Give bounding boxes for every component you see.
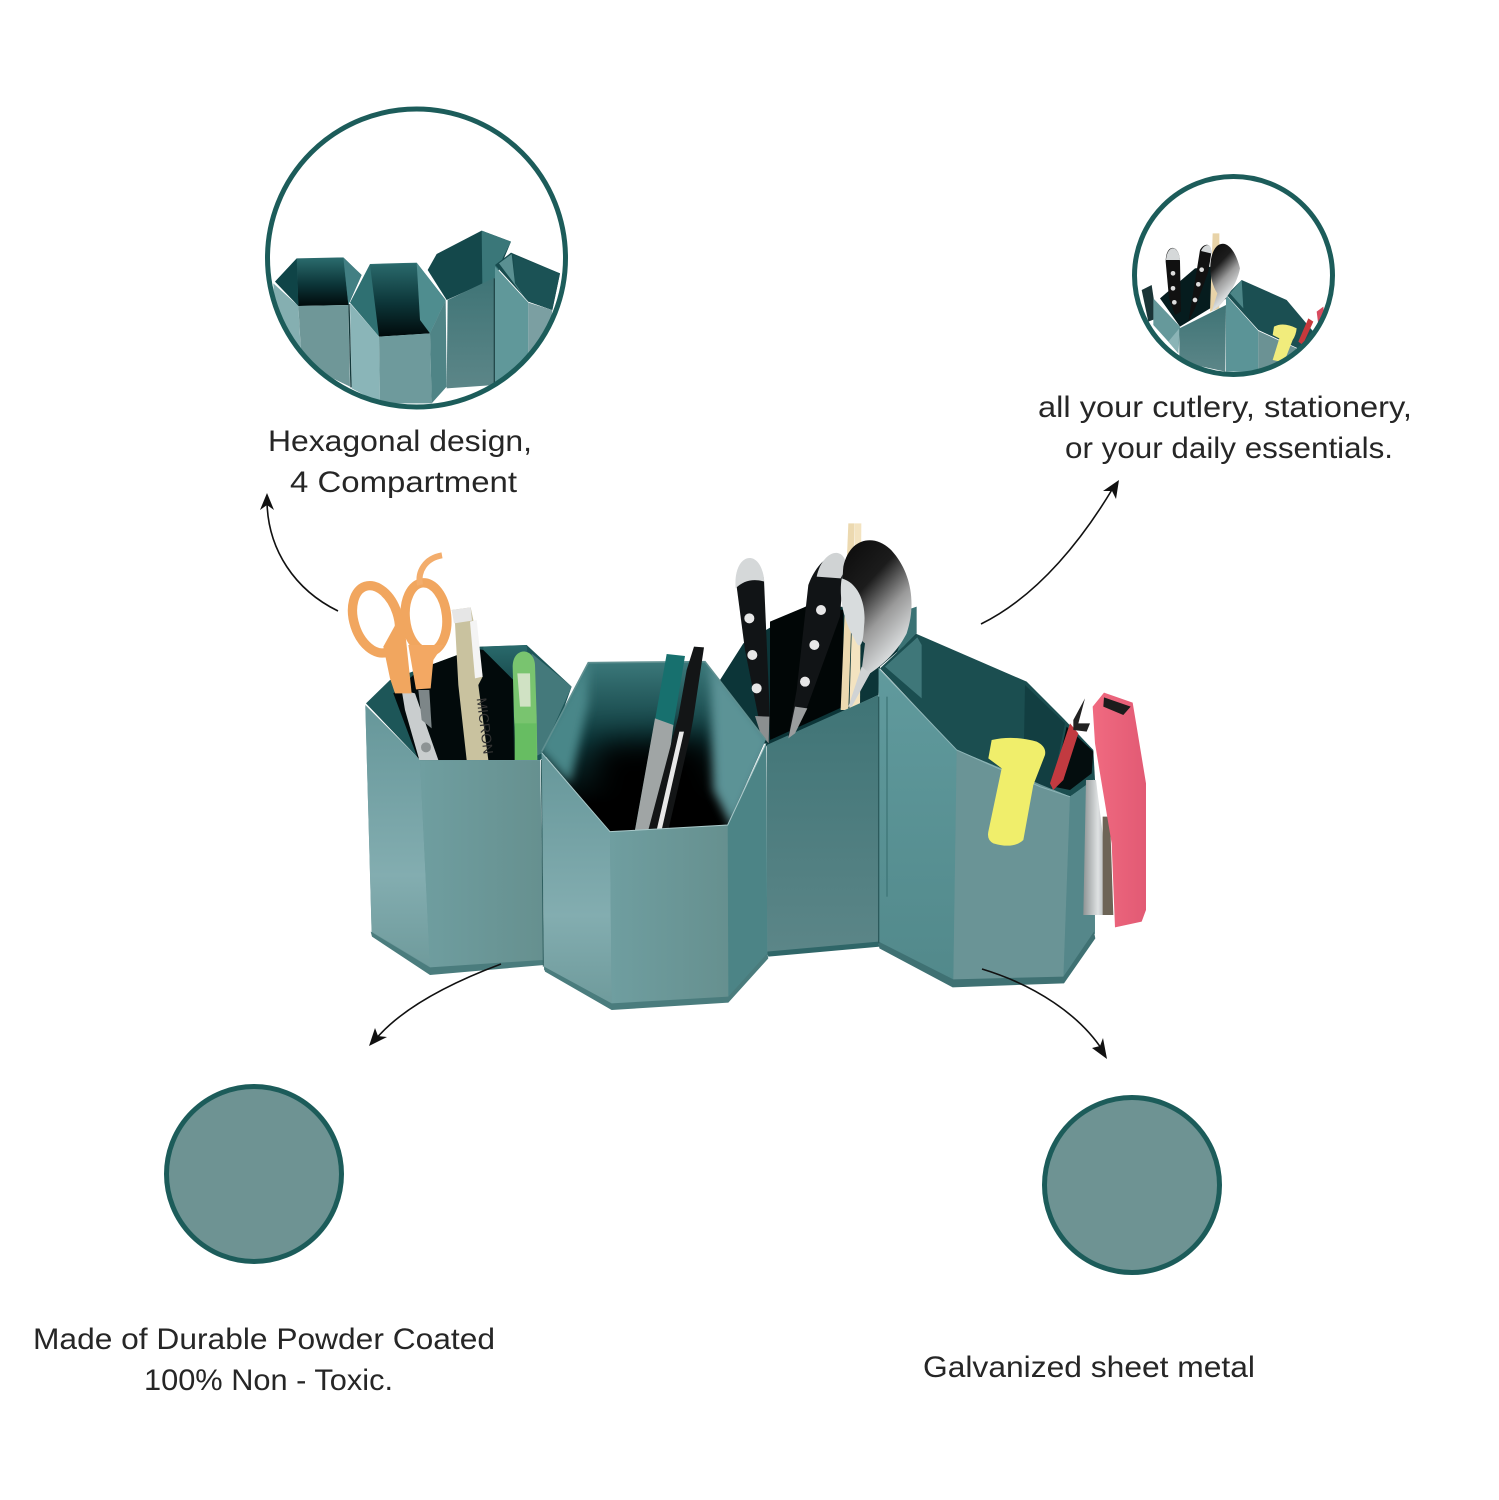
compartment 1 with scissors and pens [344,555,577,975]
heading: everyday essentials: or your daily essentials. [1065,432,1393,465]
scissors blades [402,690,438,760]
arrow: to powder coated [369,964,501,1046]
heading: hexagonal design: 4 Compartment [290,466,518,499]
panel: everyday essentials inset [1134,176,1332,374]
stapler body [1083,780,1113,915]
micro pen [452,607,488,760]
stapler pink handle [1093,693,1146,927]
green pen [513,651,537,760]
text: powder coated: 100% Non - Toxic. [144,1364,393,1397]
swatch: powder coat colour [166,1086,342,1262]
highlighter [988,738,1045,846]
arrow: to everyday essentials [981,480,1119,624]
infographic canvas [36,106,1409,1390]
swatch: sheet metal colour [1044,1098,1220,1272]
arrow: to galvanized metal [982,969,1107,1059]
compartment 1 with scissors and pens: MICRON [474,697,496,755]
panel: hexagonal design inset [268,109,566,407]
compartment 3 with cutlery [720,523,917,957]
product: hexagonal desk organizer [344,523,1146,1010]
green marker [635,654,685,830]
arrow: to hexagonal design [260,493,338,611]
compartment 4 with highlighter and stapler [879,634,1146,987]
chopsticks [841,523,855,710]
compartment 2 with markers [537,647,773,1010]
knife 1 [736,559,770,743]
spoon [843,540,912,707]
text: galvanized metal: Galvanized sheet metal [923,1351,1255,1384]
black pen [648,647,704,830]
heading: hexagonal design [268,425,532,499]
text: powder coated [33,1323,495,1397]
text: powder coated: Made of Durable Powder Coated [33,1323,495,1356]
scissors handles [344,580,450,659]
heading: everyday essentials [1038,391,1412,465]
heading: everyday essentials: all your cutlery, stationery, [1038,391,1412,424]
scissors tool [1050,723,1078,790]
knife 2 [788,557,843,737]
heading: hexagonal design: Hexagonal design, [268,425,532,458]
